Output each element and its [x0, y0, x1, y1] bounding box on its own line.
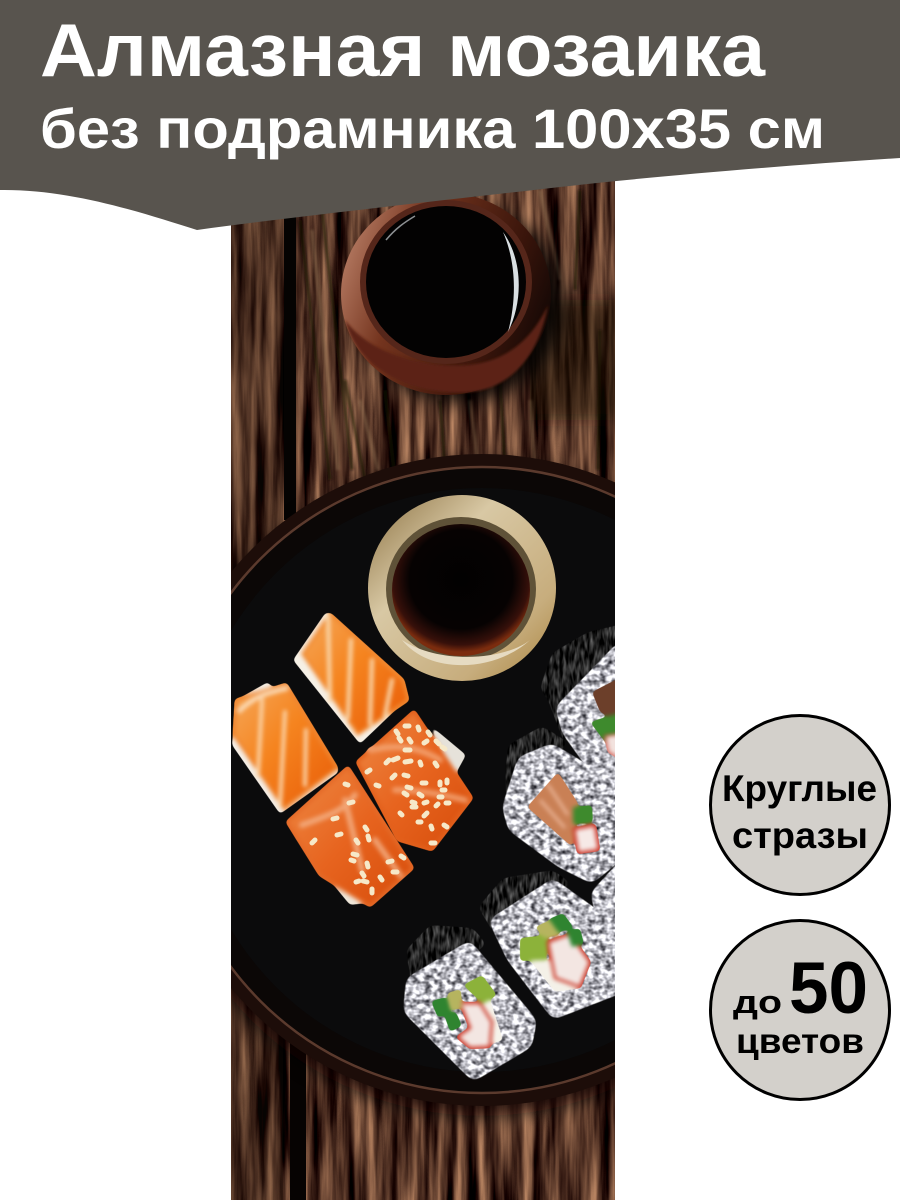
nigiri: left: [232, 682, 339, 814]
sauce bowl: [368, 495, 556, 681]
roll: lower right: [480, 871, 615, 1018]
title: Алмазная мозаика: [40, 8, 766, 92]
product image: sushi on wooden table: [231, 181, 615, 1200]
subtitle: без подрамника 100х35 см: [40, 97, 825, 160]
roll: top right: [541, 626, 615, 782]
badge: up to 50 colours: до: [733, 984, 782, 1020]
badge: up to 50 colours: цветов: [736, 1022, 864, 1061]
top banner: [0, 0, 900, 230]
roll: middle right: [502, 728, 615, 882]
banner shape: [0, 0, 900, 230]
soy sauce pot: [341, 193, 564, 403]
badge: round rhinestones: стразы: [732, 815, 868, 856]
nigiri: top: [293, 612, 408, 744]
badge: up to 50 colours: [710, 920, 890, 1100]
nigiri: right with sesame: [357, 711, 472, 850]
nigiri pieces: [232, 612, 472, 906]
badge: up to 50 colours: 50: [789, 948, 868, 1029]
roll: bottom left: [403, 925, 537, 1082]
wood table: [231, 180, 615, 1200]
badge: round rhinestones: Круглые: [722, 768, 877, 809]
nigiri: bottom with sesame: [287, 767, 413, 906]
sushi rolls: [403, 626, 615, 1080]
roll: small right edge: [591, 866, 615, 923]
badge: round rhinestones: [710, 716, 890, 894]
plate: [231, 452, 615, 1129]
